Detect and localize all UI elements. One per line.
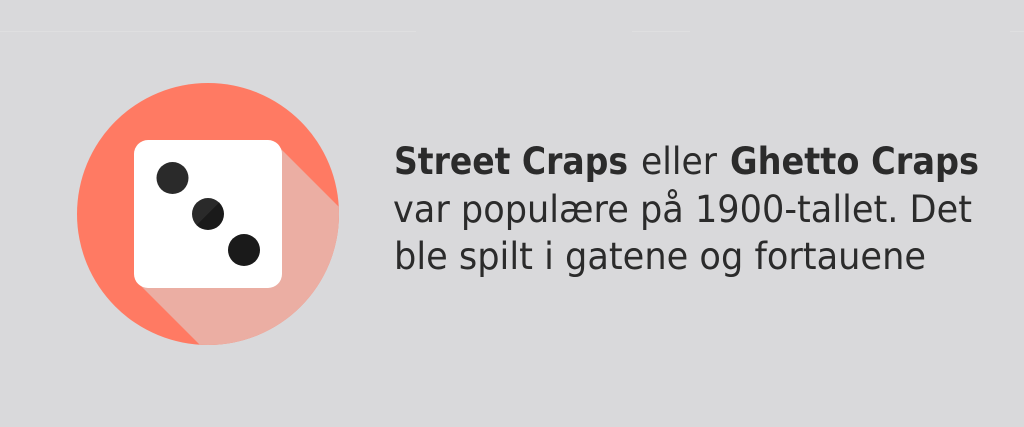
line 1: Ghetto Craps: [730, 140, 979, 183]
line 2: var populære på 1900-tallet. Det: [393, 188, 972, 231]
die pip: centre: [192, 198, 224, 230]
die face: [134, 140, 282, 288]
icon: dice in coral circle: [77, 83, 339, 345]
line 1: Street Craps: [394, 140, 628, 183]
line 3: ble spilt i gatene og fortauene: [394, 235, 926, 278]
line 1: eller: [641, 140, 718, 183]
line 1: [394, 140, 979, 183]
text block: description: [393, 140, 979, 278]
long shadow of die: [141, 149, 339, 345]
die pip: bottom right: [228, 234, 260, 266]
die pip: top left: [156, 162, 188, 194]
coral circle: [77, 83, 339, 345]
